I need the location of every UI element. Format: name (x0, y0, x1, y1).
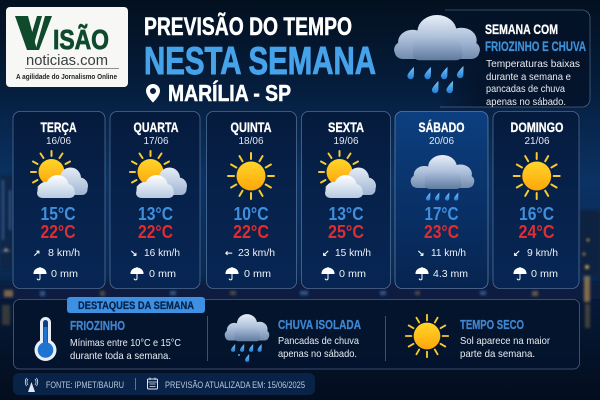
card: Domingo: 24°C (518, 222, 555, 242)
card: Domingo: DOMINGO (510, 119, 564, 135)
footer bar: source and update date: FONTE: IPMET/BAURU (46, 380, 124, 391)
highlight: Chuva isolada: Pancadas de chuva (278, 335, 359, 347)
panel: week summary (438, 10, 590, 108)
location: Marília - SP: MARÍLIA - SP (168, 79, 291, 106)
card: Domingo (493, 112, 579, 288)
badge: Destaques da semana (67, 297, 205, 313)
icon: calendar (148, 378, 158, 389)
card: Quarta: 0 mm (149, 268, 176, 280)
card: Terça: TERÇA (40, 119, 76, 135)
card: Quarta: 13°C (138, 204, 173, 224)
icon: thermometer (34, 317, 56, 361)
highlight: Chuva isolada: CHUVA ISOLADA (278, 317, 361, 332)
card: Quarta: QUARTA (134, 119, 178, 135)
title: PREVISÃO DO TEMPO (144, 11, 352, 41)
card: Sexta (302, 112, 390, 288)
title (144, 11, 376, 83)
card: Quinta: 0 mm (244, 268, 271, 280)
card: Sábado: ↘ (417, 249, 425, 259)
card: Sábado: 20/06 (429, 136, 454, 147)
card: Domingo: 16°C (519, 204, 554, 224)
card: Quinta: 23 km/h (238, 247, 275, 259)
card: Quarta (110, 112, 200, 288)
card: Sexta: 25°C (328, 222, 364, 242)
card: Domingo: ↙ (513, 249, 521, 259)
card: Quarta: 22°C (138, 222, 173, 242)
panel: week summary: SEMANA COM (485, 22, 558, 37)
card: Sábado: 4.3 mm (433, 268, 468, 280)
card: Terça: 22°C (40, 222, 76, 242)
card: Quinta: 18/06 (238, 136, 264, 147)
panel: highlights of the week (14, 297, 580, 369)
icon: rain cloud large (394, 15, 480, 93)
card: Domingo: 9 km/h (527, 247, 558, 259)
card: Quinta: 22°C (233, 222, 269, 242)
title: NESTA SEMANA (144, 40, 376, 83)
card: Terça: 0 mm (51, 268, 78, 280)
icon: antenna (25, 378, 38, 392)
highlight: Tempo seco (460, 317, 550, 360)
card: Terça: 8 km/h (48, 247, 80, 259)
card: Sábado: 17°C (424, 204, 459, 224)
card: Sábado: 23°C (424, 222, 459, 242)
card: Sexta: 19/06 (333, 136, 359, 147)
card: Sexta: SEXTA (328, 119, 364, 135)
footer bar: source and update date: PREVISÃO ATUALIZADA EM: 15/06/2025 (165, 380, 305, 391)
panel: week summary: durante a semana e (486, 71, 571, 83)
card: Sábado: SÁBADO (418, 119, 465, 135)
logo: Visão Notícias: ISÃO (53, 24, 109, 55)
highlight: Friozinho: durante toda a semana. (70, 350, 171, 362)
card: Quinta: 10°C (234, 204, 269, 224)
logo: Visão Notícias (6, 7, 128, 87)
panel: week summary: Temperaturas baixas (486, 58, 580, 70)
highlight: Tempo seco: Sol aparece na maior (460, 335, 550, 347)
panel: week summary: apenas no sábado. (486, 96, 566, 108)
highlight: Tempo seco: TEMPO SECO (460, 317, 524, 332)
card: Terça: ↗ (33, 249, 41, 259)
card: Sexta: 13°C (328, 204, 364, 224)
highlight: Friozinho: Mínimas entre 10°C e 15°C (70, 337, 181, 349)
icon: rain cloud small (225, 314, 269, 362)
card: Quarta: 17/06 (143, 136, 169, 147)
card: Sábado: 11 km/h (431, 247, 466, 259)
highlight: Tempo seco: parte da semana. (460, 348, 535, 360)
card: Quinta: QUINTA (230, 119, 272, 135)
card: Terça (13, 112, 105, 288)
card: Terça: 16/06 (46, 136, 71, 147)
highlight: Friozinho (70, 318, 181, 362)
badge: Destaques da semana: DESTAQUES DA SEMANA (78, 300, 194, 312)
highlight: Chuva isolada (278, 317, 361, 360)
card: Domingo: 21/06 (524, 136, 550, 147)
logo: Visão Notícias: noticias.com (26, 53, 108, 69)
footer bar: source and update date (13, 373, 315, 395)
card: Domingo: 0 mm (531, 268, 558, 280)
logo: Visão Notícias: A agilidade do Jornalismo Online (16, 74, 117, 81)
icon: sun (406, 315, 448, 357)
highlight: Friozinho: FRIOZINHO (70, 318, 125, 333)
card: Quinta: ← (225, 249, 233, 259)
card: Sexta: 0 mm (339, 268, 366, 280)
card: Quarta: 16 km/h (144, 247, 180, 259)
panel: week summary: pancadas de chuva (486, 83, 565, 95)
card: Sexta: ↙ (322, 249, 330, 259)
card: Quarta: ↘ (130, 249, 138, 259)
highlight: Chuva isolada: apenas no sábado. (278, 348, 357, 360)
card: Sexta: 15 km/h (335, 247, 371, 259)
card: Sábado (395, 112, 488, 288)
card: Quinta (206, 112, 296, 288)
card: Terça: 15°C (40, 204, 76, 224)
